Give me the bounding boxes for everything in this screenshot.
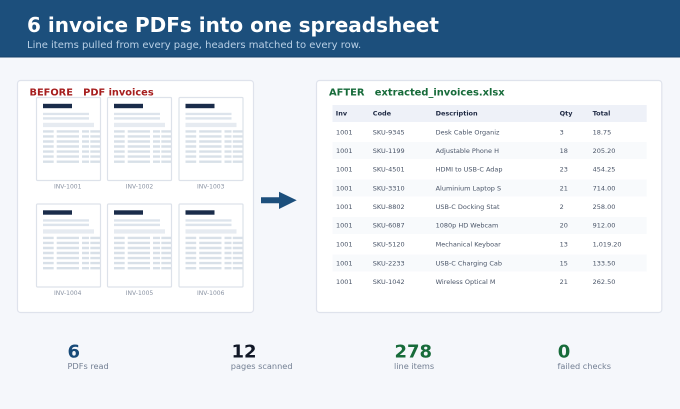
row 5: USB-C Docking Stat: [436, 203, 500, 211]
row 7: Mechanical Keyboar: [436, 240, 501, 248]
document: INV-1002: [108, 98, 172, 180]
label: INV-1003: INV-1003: [197, 183, 225, 190]
row 7: SKU-5120: [373, 240, 405, 248]
row 7: 13: [560, 240, 568, 248]
document: INV-1006: [179, 204, 243, 287]
row 2: SKU-1199: [373, 147, 405, 155]
stat: PDFs read: 6: [68, 342, 80, 362]
row 8: 1001: [336, 259, 353, 267]
row 6: 1080p HD Webcam: [436, 222, 498, 230]
row 6: 20: [560, 222, 568, 230]
row 9: SKU-1042: [373, 278, 405, 286]
row 2: Adjustable Phone H: [436, 147, 499, 155]
row 2: 18: [560, 147, 568, 155]
row 5: 1001: [336, 203, 353, 211]
row 9: 262.50: [593, 278, 615, 286]
stat: pages scanned: pages scanned: [231, 361, 293, 371]
row 8: USB-C Charging Cab: [436, 259, 502, 267]
arrow: [261, 192, 297, 209]
label: INV-1001: INV-1001: [54, 183, 82, 190]
row 1: [336, 128, 611, 136]
table header: Total: [593, 110, 610, 118]
table header: Inv: [336, 110, 348, 118]
after heading: AFTER extracted_invoices.xlsx: [329, 88, 505, 98]
row 6: 1001: [336, 222, 353, 230]
row 8: 133.50: [593, 259, 615, 267]
row 6: 912.00: [593, 222, 615, 230]
table: [332, 105, 647, 286]
row 4: 21: [560, 184, 568, 192]
table header: [332, 105, 647, 122]
table header: Code: [373, 110, 392, 118]
row 1: 1001: [336, 128, 353, 136]
stat: failed checks: [558, 342, 611, 371]
row 5: SKU-8802: [373, 203, 405, 211]
row 7: [336, 240, 622, 248]
table header: Qty: [560, 110, 573, 118]
row 8: SKU-2233: [373, 259, 405, 267]
row 7: 1,019.20: [593, 240, 622, 248]
stat: pages scanned: [231, 342, 293, 371]
table header: Description: [436, 110, 478, 118]
stat: PDFs read: [68, 342, 109, 371]
row 3: SKU-4501: [373, 166, 405, 174]
row 6: SKU-6087: [373, 222, 405, 230]
before heading: BEFORE PDF invoices: [30, 88, 154, 98]
row 6: [332, 217, 647, 234]
row 1: Desk Cable Organiz: [436, 128, 500, 136]
row 3: 1001: [336, 166, 353, 174]
row 9: 1001: [336, 278, 353, 286]
title: 6 invoice PDFs into one spreadsheet: [27, 13, 439, 37]
row 3: [336, 166, 615, 174]
row 9: [336, 278, 615, 286]
row 4: Aluminium Laptop S: [436, 184, 501, 192]
document: INV-1004: [36, 204, 100, 287]
label: INV-1004: INV-1004: [54, 290, 82, 297]
row 1: 3: [560, 128, 564, 136]
row 3: 454.25: [593, 166, 615, 174]
stat: PDFs read: PDFs read: [68, 361, 109, 371]
row 1: SKU-9345: [373, 128, 405, 136]
header banner: [0, 0, 680, 58]
row 5: 258.00: [593, 203, 615, 211]
stat: failed checks: failed checks: [558, 361, 611, 371]
document: INV-1005: [108, 204, 172, 287]
row 4: 714.00: [593, 184, 615, 192]
stat: line items: 278: [394, 342, 432, 362]
row 2: 205.20: [593, 147, 615, 155]
row 4: [332, 180, 647, 196]
row 8: 15: [560, 259, 568, 267]
row 4: SKU-3310: [373, 184, 405, 192]
stat: pages scanned: 12: [232, 342, 257, 362]
row 5: [336, 203, 615, 211]
row 4: 1001: [336, 184, 353, 192]
label: INV-1005: INV-1005: [126, 290, 153, 297]
row 3: HDMI to USB-C Adap: [436, 166, 503, 174]
row 5: 2: [560, 203, 564, 211]
row 7: 1001: [336, 240, 353, 248]
row 2: [332, 142, 647, 159]
row 3: 23: [560, 166, 568, 174]
stat: line items: [394, 342, 434, 371]
row 2: 1001: [336, 147, 353, 155]
row 8: [332, 254, 647, 272]
panel: before: [18, 80, 254, 312]
label: INV-1002: INV-1002: [126, 183, 153, 190]
row 9: 21: [560, 278, 568, 286]
row 1: 18.75: [593, 128, 611, 136]
stat: failed checks: 0: [558, 342, 570, 362]
subtitle: Line items pulled from every page, headers matched to every row.: [27, 40, 361, 51]
stat: line items: line items: [394, 361, 434, 371]
label: INV-1006: INV-1006: [197, 290, 225, 297]
row 9: Wireless Optical M: [436, 278, 496, 286]
panel: after: [316, 80, 662, 312]
document: INV-1001: [36, 98, 100, 180]
document: INV-1003: [179, 98, 243, 180]
